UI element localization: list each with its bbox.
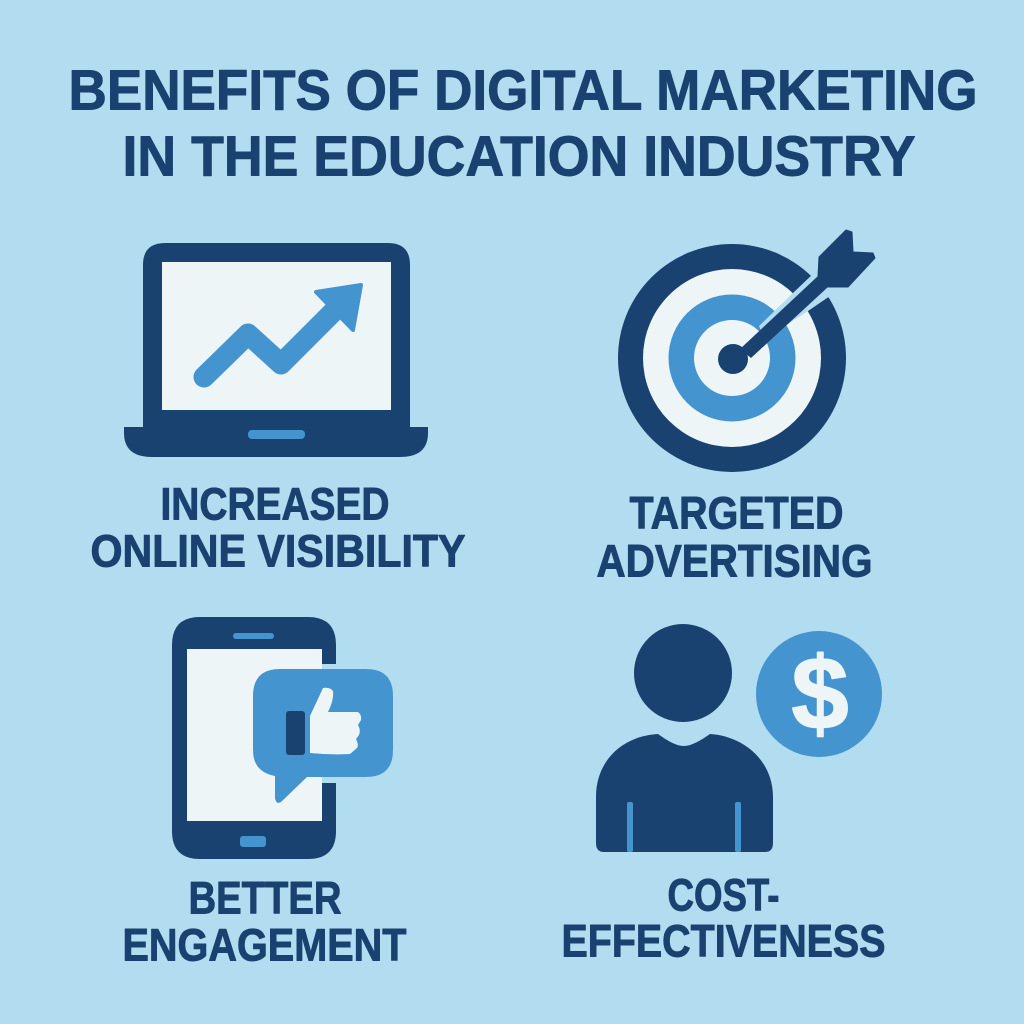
label: increased online visibility [90,478,466,576]
icon: person with dollar coin [596,624,882,852]
title [68,58,978,188]
icon: target with arrow [618,230,875,472]
label: better engagement: BETTER [188,872,342,924]
label: targeted advertising: ADVERTISING [596,536,872,586]
label: cost-effectiveness: EFFECTIVENESS [562,916,886,966]
icon: phone with thumbs-up bubble [172,617,393,859]
label: better engagement: ENGAGEMENT [122,920,406,970]
panel: targeted advertising [596,230,875,586]
icon: laptop with rising arrow [124,243,428,457]
panel: increased online visibility [90,243,466,576]
label: targeted advertising [596,488,872,586]
label: cost-effectiveness: COST- [668,870,780,920]
label: increased online visibility: INCREASED [160,478,390,530]
panel: cost-effectiveness [562,624,886,966]
label: cost-effectiveness [562,870,886,966]
label: better engagement [122,872,406,970]
icon: person with dollar coin: $ [791,636,849,751]
label: increased online visibility: ONLINE VISIBILITY [90,526,466,576]
panel: better engagement [122,617,406,970]
label: targeted advertising: TARGETED [630,488,844,538]
title: IN THE EDUCATION INDUSTRY [122,124,916,188]
title: BENEFITS OF DIGITAL MARKETING [68,58,978,122]
